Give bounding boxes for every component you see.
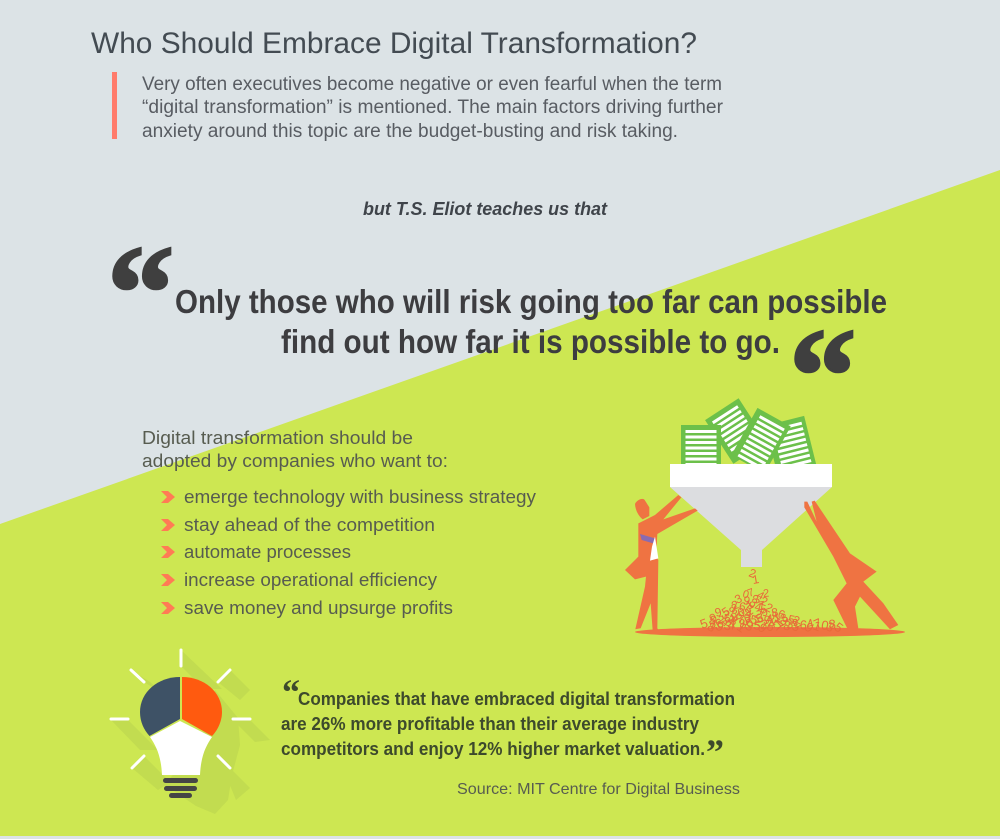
funnel illustration: [625, 398, 905, 637]
statistic quote: competitors and enjoy 12% higher market valuation.: [281, 739, 705, 759]
funnel cone: [670, 487, 832, 567]
green diagonal background: [0, 170, 1000, 836]
list of goals: [161, 487, 536, 618]
list intro: adopted by companies who want to:: [142, 451, 448, 471]
small closing quote: ”: [706, 732, 724, 772]
scattered digits: 0742: [741, 586, 771, 603]
scattered digits: 2: [747, 566, 758, 581]
scattered digits: 58296347183059264718352694170385: [698, 615, 846, 636]
bulb white base: [150, 721, 212, 775]
bulb left segment: [140, 677, 180, 736]
intro text: Very often executives become negative or even fearful when the term: [142, 74, 722, 95]
intro text: “digital transformation” is mentioned. The main factors driving further: [142, 97, 724, 118]
statistic quote: [281, 689, 735, 759]
list of goals: emerge technology with business strategy: [184, 487, 536, 507]
intro text: [142, 74, 724, 142]
documents: [681, 398, 816, 464]
list of goals: save money and upsurge profits: [184, 598, 453, 618]
light bulb icon: [111, 650, 270, 814]
list of goals: increase operational efficiency: [184, 570, 437, 590]
title: Who Should Embrace Digital Transformation?: [91, 27, 697, 60]
main quote: find out how far it is possible to go.: [281, 323, 780, 360]
list intro: Digital transformation should be: [142, 428, 413, 448]
source: Source: MIT Centre for Digital Business: [457, 781, 740, 798]
closing quote mark: “: [789, 302, 856, 451]
subheading: but T.S. Eliot teaches us that: [363, 199, 608, 219]
scattered digits: 82651472: [726, 597, 775, 617]
scattered digits: [698, 566, 846, 636]
right figure: [804, 501, 898, 631]
rays: [111, 650, 250, 768]
scattered digits: 592468173052694718352: [707, 610, 802, 630]
intro text: anxiety around this topic are the budget-busting and risk taking.: [142, 121, 678, 142]
scattered digits: 1: [751, 572, 760, 587]
left figure: [625, 495, 698, 631]
main quote: Only those who will risk going too far can possible: [175, 283, 887, 320]
statistic quote: are 26% more profitable than their average industry: [281, 714, 699, 734]
list intro: [142, 428, 448, 471]
statistic quote: Companies that have embraced digital transformation: [298, 689, 735, 709]
bulb screw thread: [163, 778, 198, 798]
chevron bullets: [161, 491, 175, 614]
list of goals: stay ahead of the competition: [184, 515, 435, 535]
small opening quote: “: [282, 672, 300, 712]
long shadows: [111, 650, 270, 814]
list of goals: automate processes: [184, 542, 351, 562]
main quote: [175, 283, 887, 360]
accent bar: [112, 72, 117, 139]
funnel rim: [670, 464, 832, 487]
opening quote mark: “: [107, 219, 174, 368]
bulb right segment: [182, 677, 222, 736]
scattered digits: 39832: [732, 591, 770, 610]
ground shadow: [635, 627, 905, 637]
scattered digits: 93586041279386: [713, 604, 787, 623]
